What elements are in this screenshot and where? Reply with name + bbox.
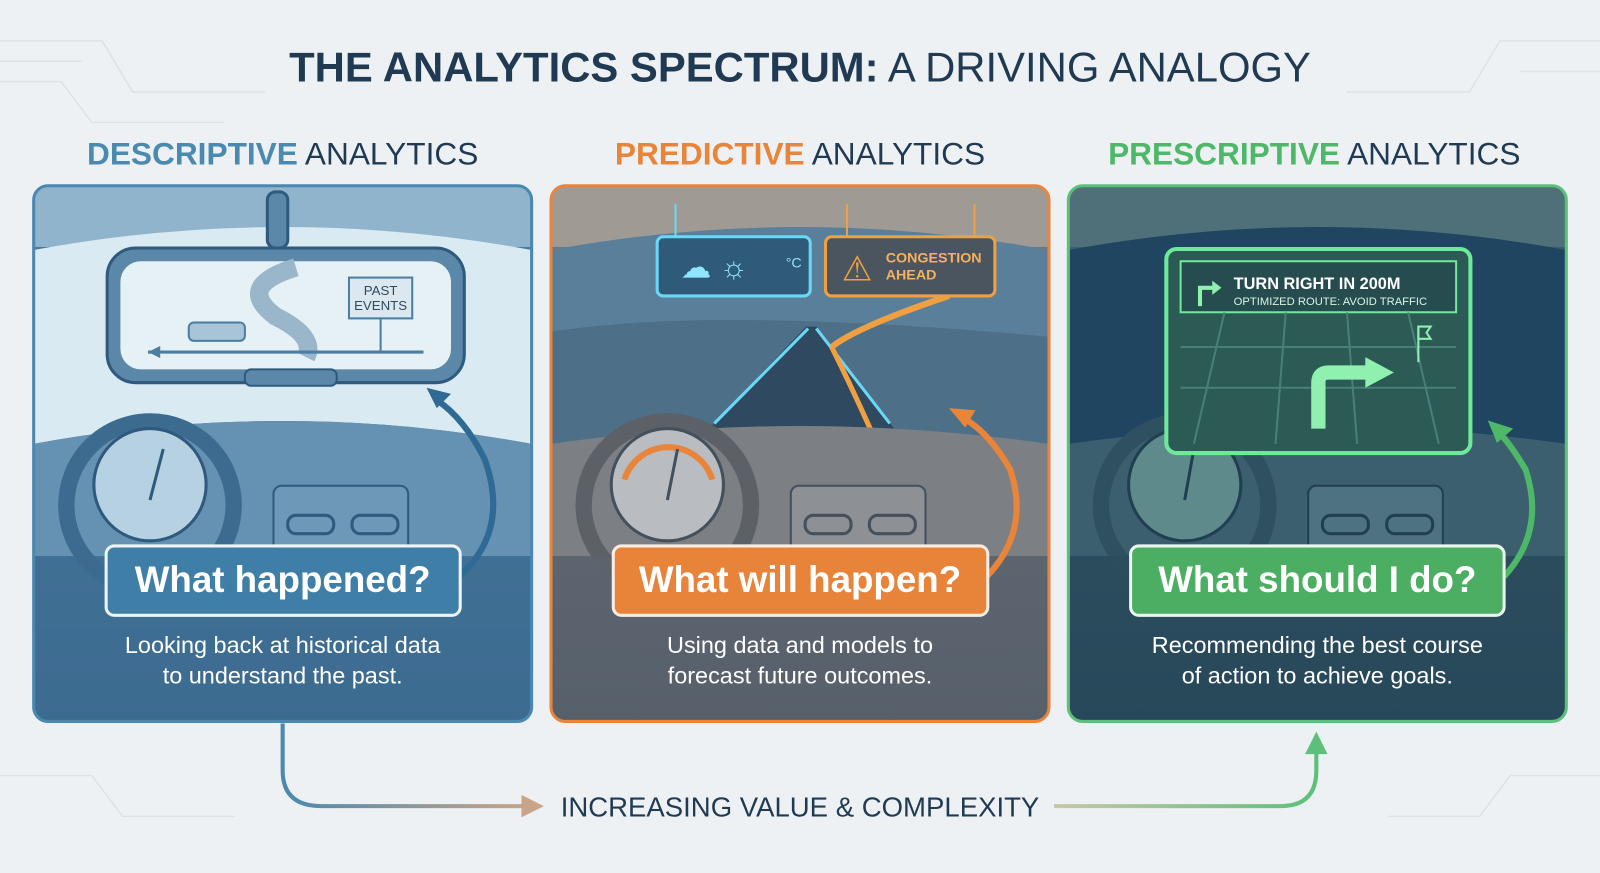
panel: prescriptive bbox=[1068, 186, 1566, 721]
sign: weather bbox=[657, 204, 810, 296]
heading: prescriptive: PRESCRIPTIVE ANALYTICS bbox=[1108, 135, 1520, 171]
callout: what should I do bbox=[1131, 546, 1504, 615]
road bbox=[712, 326, 894, 429]
callout: what should I do: What should I do? bbox=[1158, 559, 1476, 600]
callout: what will happen: What will happen? bbox=[639, 559, 961, 600]
callout: what happened: What happened? bbox=[135, 559, 431, 600]
panel: predictive bbox=[551, 186, 1049, 721]
arrow: curved up to nav bbox=[1500, 434, 1532, 577]
sign: congestion ahead: CONGESTION bbox=[886, 250, 982, 266]
sign: weather: °C bbox=[786, 255, 802, 271]
sign: congestion ahead: AHEAD bbox=[886, 268, 936, 284]
sign: congestion ahead bbox=[826, 204, 995, 296]
sign: congestion ahead: ⚠ bbox=[842, 251, 873, 289]
icon: rearview mirror: EVENTS bbox=[354, 298, 407, 313]
label: increasing value & complexity: INCREASING VALUE & COMPLEXITY bbox=[561, 791, 1039, 822]
text: prescriptive description: of action to achieve goals. bbox=[1182, 663, 1453, 689]
icon: speedometer bbox=[66, 421, 234, 589]
icon: speedometer bbox=[584, 421, 751, 589]
panel: descriptive bbox=[34, 186, 532, 721]
arrow: curved up to mirror bbox=[437, 400, 493, 577]
arrow: curved up to road bbox=[964, 418, 1017, 577]
callout: what happened bbox=[106, 546, 460, 615]
nav screen bbox=[1166, 249, 1470, 453]
nav screen: TURN RIGHT IN 200M bbox=[1234, 275, 1400, 293]
text: descriptive description: to understand the past. bbox=[163, 663, 403, 689]
nav screen: OPTIMIZED ROUTE: AVOID TRAFFIC bbox=[1234, 296, 1427, 308]
icon: rearview mirror: PAST bbox=[364, 283, 397, 298]
text: prescriptive description: Recommending the best course bbox=[1152, 632, 1483, 658]
icon: speedometer bbox=[1101, 421, 1268, 589]
callout: what will happen bbox=[613, 546, 988, 615]
icon: rearview mirror bbox=[107, 192, 464, 386]
text: descriptive description: Looking back at historical data bbox=[125, 632, 440, 658]
heading: predictive: PREDICTIVE ANALYTICS bbox=[615, 135, 985, 171]
arrow: increasing value right bbox=[1054, 732, 1328, 806]
text: predictive description: Using data and models to bbox=[667, 632, 933, 658]
arrow: increasing value left bbox=[283, 723, 544, 817]
title: THE ANALYTICS SPECTRUM: A DRIVING ANALOGY bbox=[289, 44, 1311, 91]
text: predictive description: forecast future outcomes. bbox=[668, 663, 932, 689]
heading: descriptive: DESCRIPTIVE ANALYTICS bbox=[87, 135, 478, 171]
sign: weather: ☁ ☼ bbox=[681, 251, 748, 285]
